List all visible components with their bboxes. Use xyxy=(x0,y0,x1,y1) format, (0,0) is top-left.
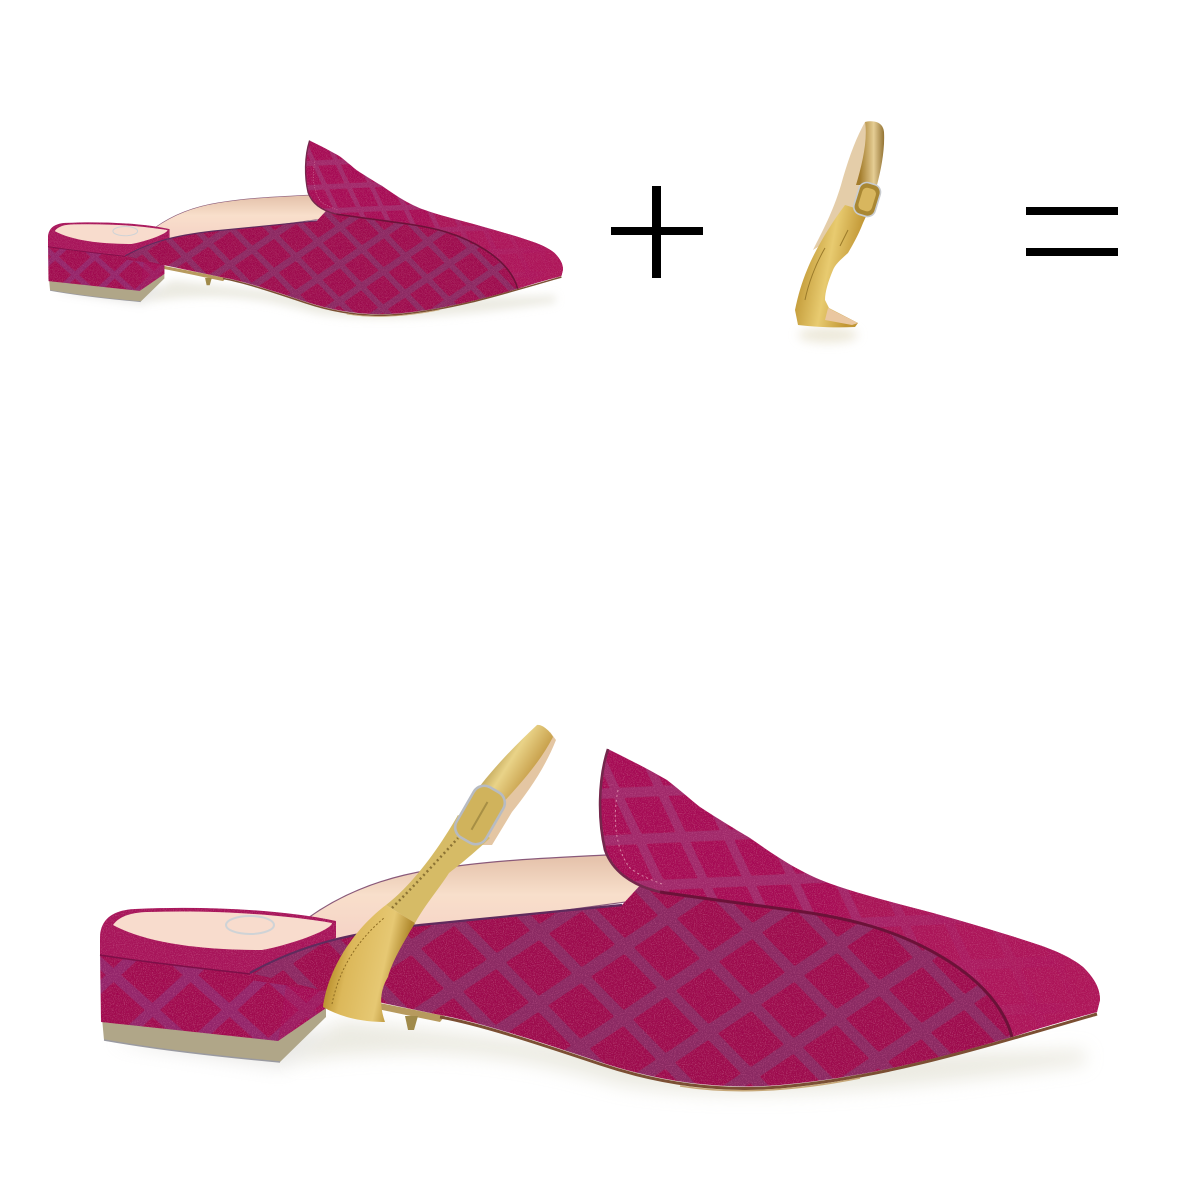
large buckle xyxy=(451,781,509,849)
small buckle xyxy=(852,181,882,219)
detachable gold strap xyxy=(795,121,884,343)
gold strap on the large shoe xyxy=(323,725,556,1022)
mule shoe, small, top left xyxy=(48,140,563,318)
mule shoe, large xyxy=(100,749,1100,1094)
combined shoe with strap, large, bottom xyxy=(100,725,1100,1094)
equals sign xyxy=(1026,207,1118,256)
plus sign xyxy=(611,186,703,278)
